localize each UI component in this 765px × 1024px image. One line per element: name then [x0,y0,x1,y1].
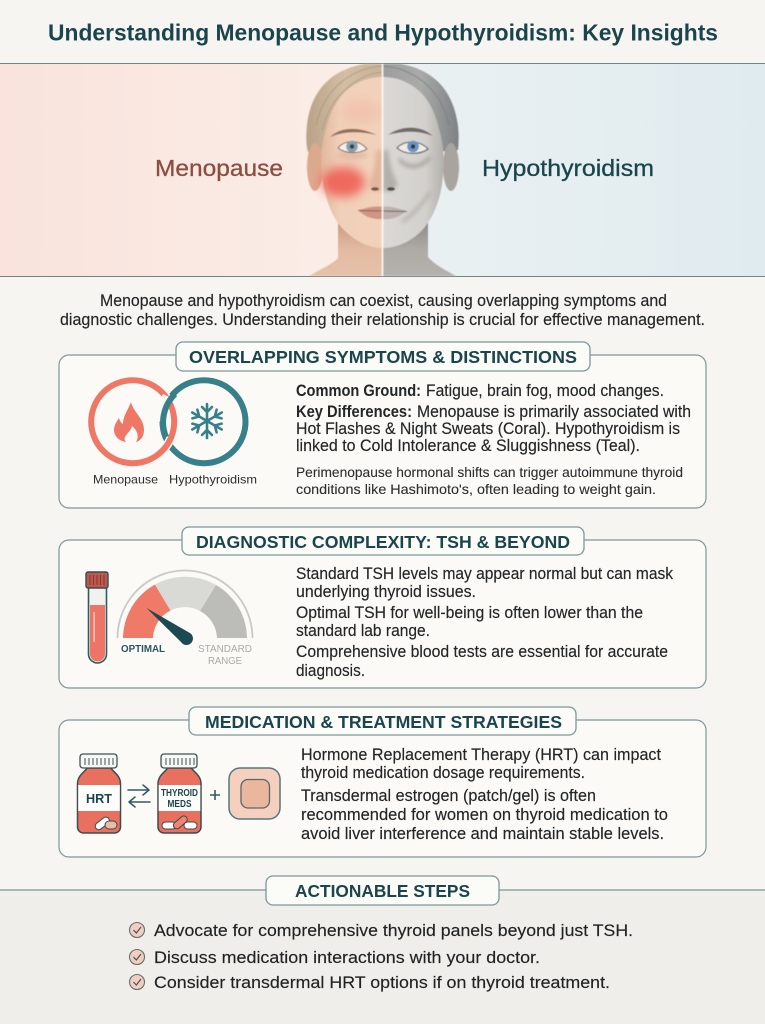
heading pill: medication and treatment [189,707,576,735]
intro text: diagnostic challenges. Understanding their relationship is crucial for effective management. [60,311,705,329]
icon: snowflake [190,404,224,438]
heading pill: actionable steps: ACTIONABLE STEPS [295,881,470,901]
title: Understanding Menopause and Hypothyroidism: Key Insights [48,20,718,46]
chart: TSH gauge: STANDARD [198,643,252,655]
icon: thyroid meds bottle [158,754,201,833]
text: TSH notes: Comprehensive blood tests are essential for accurate [296,643,668,661]
heading pill: actionable steps [266,876,499,905]
text: HRT and transdermal notes: Transdermal estrogen (patch/gel) is often [301,787,596,805]
text: common ground and key differences: Hot Flashes & Night Sweats (Coral). Hypothyroidism is [296,420,680,438]
panel: diagnostic complexity [59,527,706,688]
gauge needle [146,608,193,645]
text: common ground and key differences: Common Ground: [296,381,421,400]
split face illustration [306,63,459,277]
text: TSH notes: diagnosis. [296,662,365,680]
text: TSH notes: Standard TSH levels may appear normal but can mask [296,565,674,583]
icon: interlocking rings with flame and snowflake: Menopause [93,472,158,486]
text: perimenopause note: conditions like Hashimoto's, often leading to weight gain. [296,481,656,497]
step 1: Advocate for comprehensive thyroid panels beyond just TSH. [154,921,633,940]
icon: interlocking rings with flame and snowflake [91,380,257,486]
text: HRT and transdermal notes: thyroid medication dosage requirements. [301,764,585,782]
capsules [162,815,197,830]
chart: TSH gauge: RANGE [208,655,242,667]
text: HRT and transdermal notes: avoid liver interference and maintain stable levels. [301,825,664,843]
hero banner: split comparison [0,63,765,277]
icon: interlocking rings with flame and snowflake: Hypothyroidism [169,472,257,486]
intro text [60,292,705,329]
text: common ground and key differences: Fatigue, brain fog, mood changes. [426,382,664,400]
banner label: Hypothyroidism: Hypothyroidism [482,155,654,181]
icon: transdermal patch [229,768,280,819]
heading pill: diagnostic complexity [182,527,584,555]
text: common ground and key differences: Key Differences: [296,402,412,421]
pills [94,816,117,831]
plus sign [210,790,220,800]
heading pill: medication and treatment: MEDICATION & TREATMENT STRATEGIES [205,712,562,732]
text: perimenopause note: Perimenopause hormonal shifts can trigger autoimmune thyroid [296,464,683,480]
panel: medication and treatment [59,707,706,857]
icon: HRT bottle [78,754,120,833]
step 3: Consider transdermal HRT options if on thyroid treatment. [154,973,610,992]
heading pill: overlapping symptoms [176,342,590,371]
panel: actionable steps [0,876,765,992]
text: TSH notes [296,565,674,680]
panel: overlapping symptoms [59,342,706,508]
text: common ground and key differences [296,381,691,455]
chart: TSH gauge: OPTIMAL [121,643,166,655]
banner label: Menopause: Menopause [155,155,283,181]
arrows: medication interaction [128,785,150,807]
text: TSH notes: underlying thyroid issues. [296,583,476,601]
text: common ground and key differences: Menopause is primarily associated with [417,403,691,421]
text: common ground and key differences: linked to Cold Intolerance & Sluggishness (Teal). [296,437,640,455]
text: perimenopause note [296,464,683,497]
heading pill: overlapping symptoms: OVERLAPPING SYMPTOMS & DISTINCTIONS [189,347,577,367]
step 2: Discuss medication interactions with your doctor. [154,948,540,967]
heading pill: diagnostic complexity: DIAGNOSTIC COMPLEXITY: TSH & BEYOND [196,532,570,552]
text: HRT and transdermal notes: recommended for women on thyroid medication to [301,806,668,824]
icon: thyroid meds bottle: MEDS [168,799,192,810]
intro text: Menopause and hypothyroidism can coexist, causing overlapping symptoms and [100,292,667,310]
icon: blood test tube [86,572,108,663]
text: TSH notes: standard lab range. [296,622,430,640]
icon: thyroid meds bottle: THYROID [161,788,198,799]
text: HRT and transdermal notes: Hormone Replacement Therapy (HRT) can impact [301,746,661,764]
text: HRT and transdermal notes [301,746,668,843]
text: TSH notes: Optimal TSH for well-being is often lower than the [296,604,643,622]
icon: flame [114,402,144,442]
icon: HRT bottle: HRT [86,792,112,806]
chart: TSH gauge [118,570,252,667]
